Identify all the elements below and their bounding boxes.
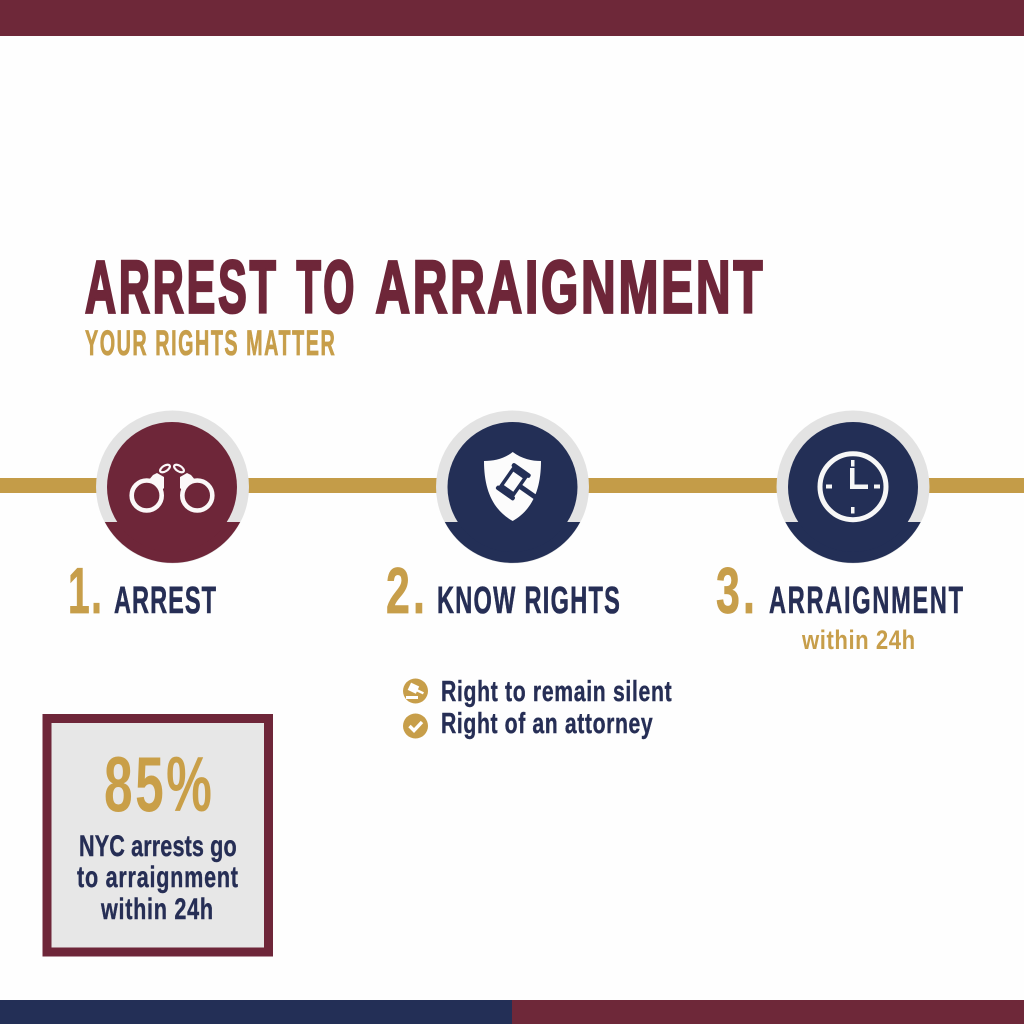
bottom bar navy: [0, 1000, 512, 1024]
step 1 label: ARREST: [114, 578, 216, 621]
title: [85, 245, 763, 329]
stat description: to arraignment: [77, 859, 238, 894]
subtitle: YOUR RIGHTS MATTER: [85, 324, 335, 364]
title: TO: [296, 245, 354, 329]
stat box: [47, 718, 268, 952]
step 1 label: [68, 555, 216, 628]
right 1: Right to remain silent: [441, 676, 672, 708]
timeline line: [0, 478, 1024, 493]
step 3 label: [716, 554, 963, 656]
rights list: [403, 676, 672, 740]
title: ARRAIGNMENT: [376, 247, 763, 329]
step 1 icon: handcuffs: [96, 410, 249, 564]
step 2 label: 2.: [386, 554, 425, 627]
stat description: within 24h: [100, 891, 213, 926]
step 3 label: 3.: [716, 554, 755, 627]
step 3 icon: clock: [776, 410, 930, 564]
top bar: [0, 0, 1024, 36]
step 2 icon: shield with gavel: [436, 410, 589, 564]
right 2: Right of an attorney: [441, 708, 653, 740]
step 2 label: KNOW RIGHTS: [437, 578, 620, 621]
step 1 label: 1.: [68, 555, 102, 628]
stat description: NYC arrests go: [79, 828, 237, 863]
stat description: [77, 828, 238, 926]
icon: gavel bullet: [403, 678, 428, 704]
step 3 label: within 24h: [801, 626, 915, 656]
step 2 label: [386, 554, 620, 627]
stat number: 85%: [104, 741, 212, 829]
icon: check bullet: [403, 714, 428, 738]
step 3 label: ARRAIGNMENT: [769, 578, 963, 621]
bottom bar maroon: [512, 1000, 1024, 1024]
title: ARREST: [85, 245, 276, 328]
